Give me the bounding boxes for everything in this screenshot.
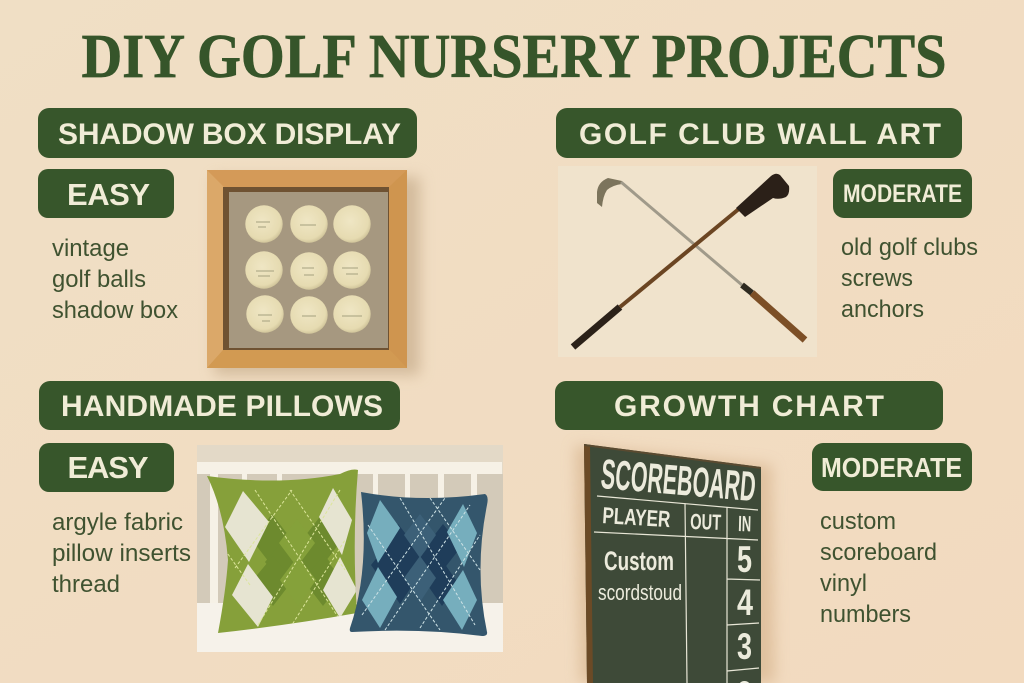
panel: handmade pillows <box>39 381 503 652</box>
materials list: shadow box <box>52 297 178 324</box>
image: scoreboard: OUT <box>690 509 722 535</box>
materials list <box>820 508 937 628</box>
heading: shadow box display: SHADOW BOX DISPLAY <box>58 118 401 151</box>
image: crossed golf clubs <box>558 166 817 357</box>
materials list: pillow inserts <box>52 540 191 567</box>
panel: golf club wall art <box>556 108 978 357</box>
image: scoreboard: Custom <box>604 546 674 576</box>
image: scoreboard: 4 <box>737 582 753 623</box>
heading: golf club wall art <box>556 108 962 158</box>
badge: moderate: MODERATE <box>843 180 962 208</box>
badge: easy <box>39 443 174 492</box>
image: scoreboard: 3 <box>737 626 752 667</box>
materials list: argyle fabric <box>52 509 183 536</box>
materials list: vinyl <box>820 570 867 597</box>
materials list: thread <box>52 571 120 598</box>
heading: growth chart: GROWTH CHART <box>614 390 884 423</box>
materials list: custom <box>820 508 896 535</box>
materials list <box>52 235 178 324</box>
panel: shadow box display <box>38 108 420 375</box>
materials list: numbers <box>820 601 911 628</box>
heading: growth chart <box>555 381 943 430</box>
heading: handmade pillows <box>39 381 400 430</box>
image: scoreboard: SCOREBOARD <box>599 450 758 510</box>
image: scoreboard: PLAYER <box>602 502 671 532</box>
green pillow <box>207 470 358 633</box>
badge: easy: EASY <box>68 450 149 485</box>
materials list <box>52 509 191 598</box>
image: scoreboard: scordstoud <box>598 580 682 605</box>
materials list: scoreboard <box>820 539 937 566</box>
heading: golf club wall art: GOLF CLUB WALL ART <box>579 118 941 151</box>
badge: easy <box>38 169 174 218</box>
materials list: old golf clubs <box>841 234 978 261</box>
title: DIY GOLF NURSERY PROJECTS <box>82 23 946 91</box>
badge: moderate <box>812 443 972 491</box>
materials list: screws <box>841 265 913 292</box>
image: scoreboard <box>575 444 775 683</box>
badge: moderate: MODERATE <box>821 452 962 483</box>
materials list: vintage <box>52 235 129 262</box>
heading: handmade pillows: HANDMADE PILLOWS <box>61 390 383 423</box>
badge: easy: EASY <box>67 177 150 212</box>
image: argyle pillows <box>197 445 503 652</box>
heading: shadow box display <box>38 108 417 158</box>
image: scoreboard: IN <box>738 511 752 536</box>
materials list <box>841 234 978 323</box>
panel: growth chart <box>555 381 972 683</box>
materials list: golf balls <box>52 266 146 293</box>
image: scoreboard: 5 <box>737 539 752 580</box>
badge: moderate <box>833 169 972 218</box>
materials list: anchors <box>841 296 924 323</box>
image: shadow box with golf balls <box>207 170 420 375</box>
blue pillow <box>345 488 490 638</box>
